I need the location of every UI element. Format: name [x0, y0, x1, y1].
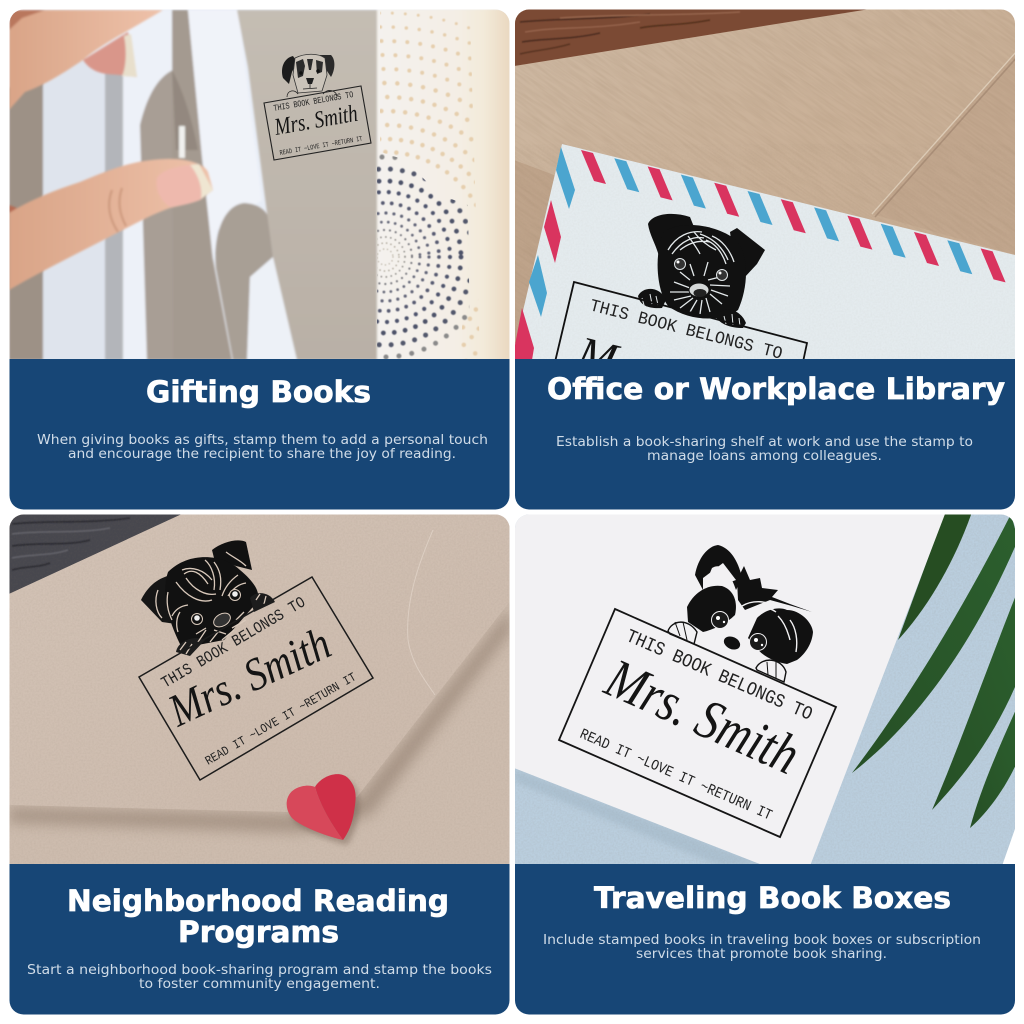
text block: office or workplace library	[556, 435, 973, 464]
green leaves	[852, 512, 1018, 828]
stamp text: READ IT ~LOVE IT ~RETURN IT	[203, 670, 359, 768]
airmail card	[515, 144, 1015, 360]
text block: office or workplace library: manage loans among colleagues.	[647, 449, 882, 464]
photo: kraft envelope with heart seal	[9, 514, 511, 866]
photo: hand opening stamped book	[10, 10, 510, 359]
panel: neighborhood reading programs	[9, 514, 511, 1016]
airmail stripes	[515, 147, 1006, 360]
wood table	[514, 9, 870, 66]
flap shadow	[9, 608, 511, 832]
panel: office or workplace library	[515, 10, 1015, 510]
dark wood	[9, 514, 182, 594]
stamp text	[272, 90, 363, 158]
text block: gifting books: and encourage the recipient to share the joy of reading.	[68, 447, 456, 462]
caption bar	[514, 359, 1016, 511]
caption bar	[9, 864, 511, 1016]
stamp text: Mrs. Smith	[160, 617, 338, 736]
panel: traveling book boxes	[514, 512, 1018, 1016]
heading: neighborhood reading programs: Neighborhood Reading	[67, 884, 449, 918]
text block: gifting books	[37, 433, 488, 462]
dog illustration	[638, 214, 765, 328]
text block: traveling book boxes	[543, 933, 981, 962]
stamp text: THIS BOOK BELONGS TO	[588, 296, 784, 365]
envelope paper	[523, 22, 984, 178]
stamp text	[577, 625, 816, 825]
photo: airmail envelope with stamp	[515, 10, 1015, 359]
stamp text: THIS BOOK BELONGS TO	[273, 90, 354, 114]
envelope flap edges	[515, 160, 554, 343]
stamp text: THIS BOOK BELONGS TO	[623, 625, 816, 726]
text block: neighborhood reading programs: Start a neighborhood book-sharing program and stamp the books	[27, 963, 492, 978]
text block: neighborhood reading programs: to foster community engagement.	[139, 977, 380, 992]
white paper	[514, 514, 945, 866]
stamp: gifting	[264, 54, 371, 160]
photo: white card with leaves	[514, 512, 1018, 866]
panel: gifting books	[10, 10, 510, 510]
text block: traveling book boxes: Include stamped books in traveling book boxes or subscription	[543, 933, 981, 948]
paper grain	[322, 542, 323, 543]
stamp text: THIS BOOK BELONGS TO	[158, 594, 309, 692]
dark dot pattern	[377, 154, 470, 359]
text block: neighborhood reading programs	[27, 963, 492, 992]
dog illustration	[282, 54, 337, 97]
stamp text: M	[572, 326, 625, 386]
caption bar	[514, 864, 1016, 1016]
white corner	[1002, 826, 1016, 866]
heading: neighborhood reading programs: Programs	[178, 915, 339, 949]
dog illustration	[668, 545, 813, 682]
fur highlights	[156, 552, 266, 654]
heading: office or workplace library: Office or Workplace Library	[547, 372, 1005, 406]
heading: traveling book boxes: Traveling Book Boxes	[594, 881, 951, 915]
stamp text: Mrs. Smith	[596, 647, 808, 787]
dog illustration	[141, 540, 275, 656]
fur highlights	[642, 232, 740, 326]
heading: gifting books: Gifting Books	[146, 375, 371, 409]
envelope flap	[9, 514, 511, 812]
stamp frame	[559, 609, 836, 837]
text block: gifting books: When giving books as gifts, stamp them to add a personal touch	[37, 433, 488, 448]
text block: traveling book boxes: services that promote book sharing.	[636, 947, 887, 962]
light dot pattern	[380, 11, 480, 359]
fingers	[9, 10, 213, 290]
text block: office or workplace library: Establish a book-sharing shelf at work and use the stamp to	[556, 435, 973, 450]
heading: neighborhood reading programs	[67, 884, 449, 949]
stamp frame	[555, 282, 807, 362]
icon: red paper heart	[287, 774, 360, 845]
stamp text: Mrs. Smith	[272, 101, 360, 141]
stamp text: READ IT ~LOVE IT ~RETURN IT	[577, 726, 775, 825]
paper shadow	[515, 769, 762, 866]
stamp frame	[264, 86, 371, 160]
stamp frame	[139, 577, 373, 780]
stamp text: READ IT ~LOVE IT ~RETURN IT	[279, 135, 363, 158]
caption bar	[9, 359, 511, 511]
